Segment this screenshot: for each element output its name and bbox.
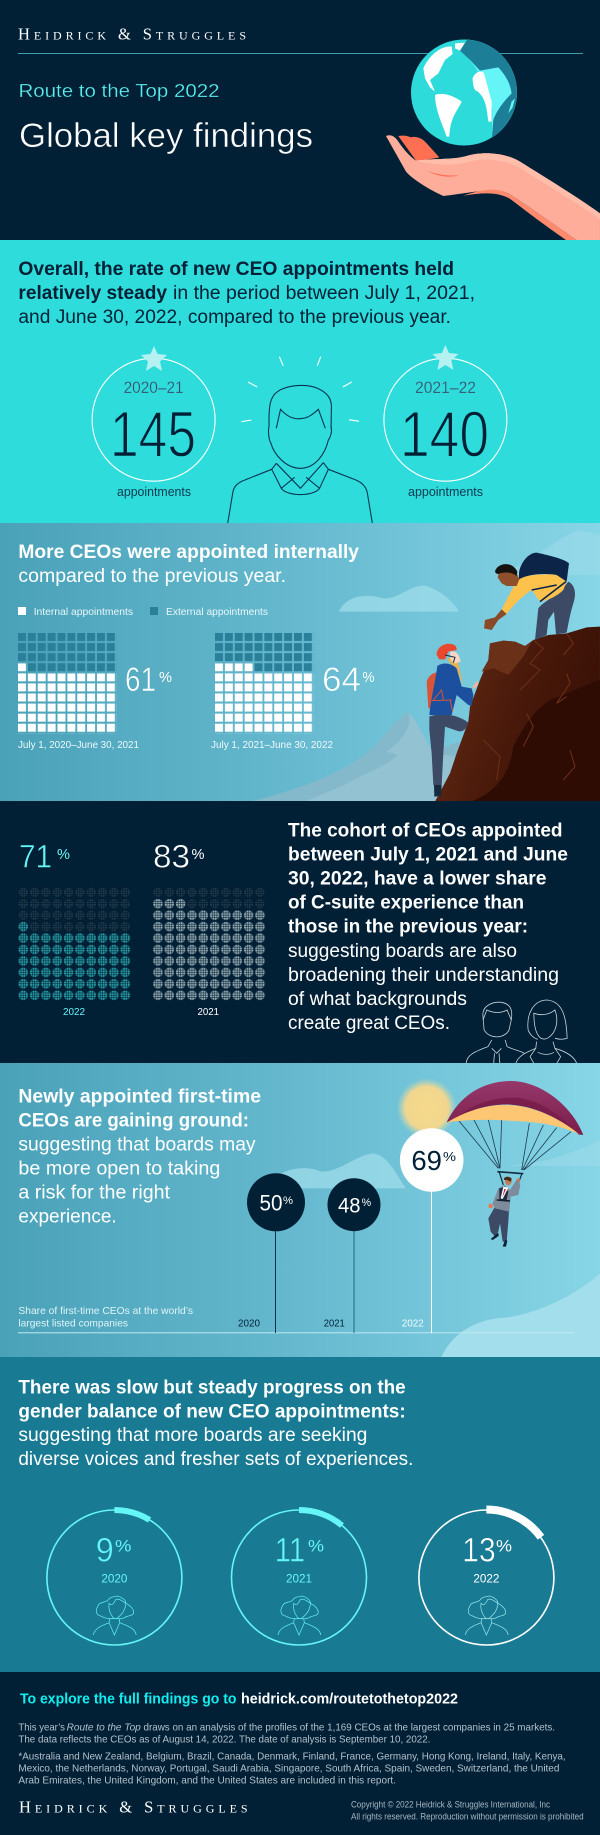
illustration: paraglider [447,1081,583,1247]
stat: 2020–21 145 appointments: appointments [117,485,191,499]
panel: new CEO appointments [0,240,600,523]
logo: Heidrick & Struggles: Heidrick & Struggles [19,1798,248,1817]
body text: broadening their understanding [288,965,559,986]
title: Global key findings [19,117,313,155]
ring: 2021 11%: % [308,1537,324,1556]
body text: 30, 2022, have a lower share [288,869,546,890]
ring: 2020 9% [47,1510,182,1645]
heading text [18,259,475,328]
body text: suggesting that more boards are seeking [18,1425,367,1446]
chart: waffle 64% internal: % [362,669,374,686]
body text: a risk for the right [18,1183,171,1204]
chart: globe waffle 2021 [152,839,266,1018]
ring: 2022 13%: % [496,1537,512,1556]
chart caption: largest listed companies [18,1318,128,1330]
chart: globe waffle 2021: 2021 [198,1007,219,1018]
balloon: 2021 48%: 2021 [324,1318,345,1330]
ring: 2022 13% [419,1510,554,1645]
heading text [18,542,359,587]
body text: suggesting that boards may [18,1135,256,1156]
body text: There was slow but steady progress on the [18,1377,406,1398]
copyright [351,1800,584,1821]
body text: between July 1, 2021 and June [288,845,568,866]
heading text: relatively steady [18,283,167,304]
panel: internal appointments [0,523,600,803]
body text: be more open to taking [18,1159,220,1180]
heading text: in the period between July 1, 2021, [173,283,475,304]
body text: CEOs are gaining ground: [18,1111,249,1132]
methodology notes: The data reflects the CEOs as of August 14, 2022. The date of analysis is September 10, 2022. [18,1735,430,1746]
balloon: 2021 48% [324,1178,380,1333]
body text [18,1087,261,1228]
methodology notes: Route to the Top [67,1723,141,1734]
balloon: 2022 69%: 2022 [402,1318,424,1330]
ring: 2020 9%: 9 [96,1532,114,1570]
ring: 2020 9%: 2020 [101,1572,128,1586]
illustration: clouds and sun [264,1078,600,1360]
body text: Newly appointed first-time [18,1087,261,1108]
methodology notes: draws on an analysis of the profiles of the 1,169 CEOs at the largest companies in 25 markets. [144,1723,555,1734]
chart: globe waffle 2022 [18,839,131,1018]
woman climber [429,714,468,785]
methodology notes: Arab Emirates, the United Kingdom, and the United States are included in this report. [18,1776,396,1787]
ring: 2021 11% [232,1510,366,1645]
ring: 2022 13%: 13 [462,1532,496,1570]
stat: 2021–22 140 appointments: 2021–22 [415,378,476,397]
chart: waffle 61% internal: 61 [125,661,156,699]
panel: C-suite experience [0,801,600,1063]
chart: globe waffle 2021: % [192,846,204,863]
stat: 2020–21 145 appointments: 145 [110,398,196,471]
balloon: 2020 50% [238,1173,305,1333]
heading text: Overall, the rate of new CEO appointments held [18,259,454,280]
subtitle: Route to the Top 2022 [18,80,220,101]
call to action: To explore the full findings go to [20,1691,237,1707]
heading text: and June 30, 2022, compared to the previous year. [18,307,451,328]
chart: waffle 61% internal: July 1, 2020–June 30, 2021 [18,739,139,751]
body text: suggesting boards are also [288,941,517,962]
illustration: climbers on rock [427,553,600,803]
chart: waffle 64% internal: July 1, 2021–June 30, 2022 [211,739,333,751]
balloon: 2021 48%: % [362,1197,371,1209]
body text: The cohort of CEOs appointed [288,821,562,842]
body text: of what backgrounds [288,989,467,1010]
body text [288,821,568,1034]
call to action: heidrick.com/routetothetop2022 [241,1691,458,1707]
balloon: 2022 69%: 69 [411,1145,442,1176]
logo: Heidrick & Struggles: Heidrick & Struggles [18,24,246,44]
body text [18,1377,413,1470]
chart caption: Share of first-time CEOs at the world’s [18,1305,193,1317]
stat: 2020–21 145 appointments: 2020–21 [124,378,184,397]
copyright: Copyright © 2022 Heidrick & Struggles International, Inc [351,1800,550,1810]
balloon: 2022 69% [400,1128,464,1333]
methodology notes [18,1723,566,1787]
stat: 2021–22 140 appointments: appointments [408,485,483,499]
panel: first-time CEOs [0,1063,600,1360]
heading text: compared to the previous year. [18,566,286,587]
methodology notes: *Australia and New Zealand, Belgium, Brazil, Canada, Denmark, Finland, France, Germany, Hong Kong, Ireland, Italy, Kenya, [18,1751,566,1762]
methodology notes: This year’s [18,1723,65,1734]
call to action [20,1691,458,1707]
body text: of C-suite experience than [288,893,524,914]
chart: globe waffle 2022: 2022 [63,1007,85,1018]
icon: two executives outline [466,1000,577,1063]
panel: gender balance [0,1357,600,1672]
chart: globe waffle 2022: % [57,846,70,863]
stat: 2020–21 145 appointments [92,346,215,499]
body text: create great CEOs. [288,1013,450,1034]
ring: 2021 11%: 11 [275,1532,305,1570]
chart: waffle 61% internal [18,633,172,751]
icon: CEO outline figure with rays [228,357,372,523]
stat: 2021–22 140 appointments [384,345,507,499]
chart caption [18,1306,193,1328]
balloon: 2020 50%: 50 [260,1191,282,1216]
chart: globe waffle 2022: 71 [19,839,52,875]
legend [18,607,268,617]
balloon: 2021 48%: 48 [338,1195,360,1218]
body text: experience. [18,1207,117,1228]
chart: axis [18,1332,574,1333]
man climber [535,582,575,640]
heading text: More CEOs were appointed internally [18,542,359,563]
chart: globe waffle 2021: 83 [153,839,190,875]
panel: footer [0,1672,600,1835]
balloon: 2022 69%: % [443,1149,456,1164]
body text: those in the previous year: [288,917,528,938]
body text: gender balance of new CEO appointments: [18,1401,406,1422]
ring: 2022 13%: 2022 [473,1572,500,1586]
icon: hand [386,135,600,240]
panel: header [18,28,600,240]
balloon: 2020 50%: % [283,1195,293,1207]
legend: Internal appointments [34,606,133,618]
stat: 2021–22 140 appointments: 140 [400,398,489,471]
chart: waffle 64% internal [211,633,374,751]
chart: waffle 64% internal: 64 [322,661,361,699]
ring: 2021 11%: 2021 [286,1572,312,1586]
ring: 2020 9%: % [115,1537,131,1556]
methodology notes: Mexico, the Netherlands, Norway, Portugal, Saudi Arabia, Singapore, South Africa, Spain, Sweden, Switzerland, the United [18,1764,560,1774]
icon: globe [411,38,520,147]
chart: waffle 61% internal: % [159,669,172,686]
balloon: 2020 50%: 2020 [238,1318,260,1330]
illustration: clouds and mountain [253,530,600,801]
legend: External appointments [166,606,268,618]
body text: diverse voices and fresher sets of experiences. [18,1449,413,1470]
